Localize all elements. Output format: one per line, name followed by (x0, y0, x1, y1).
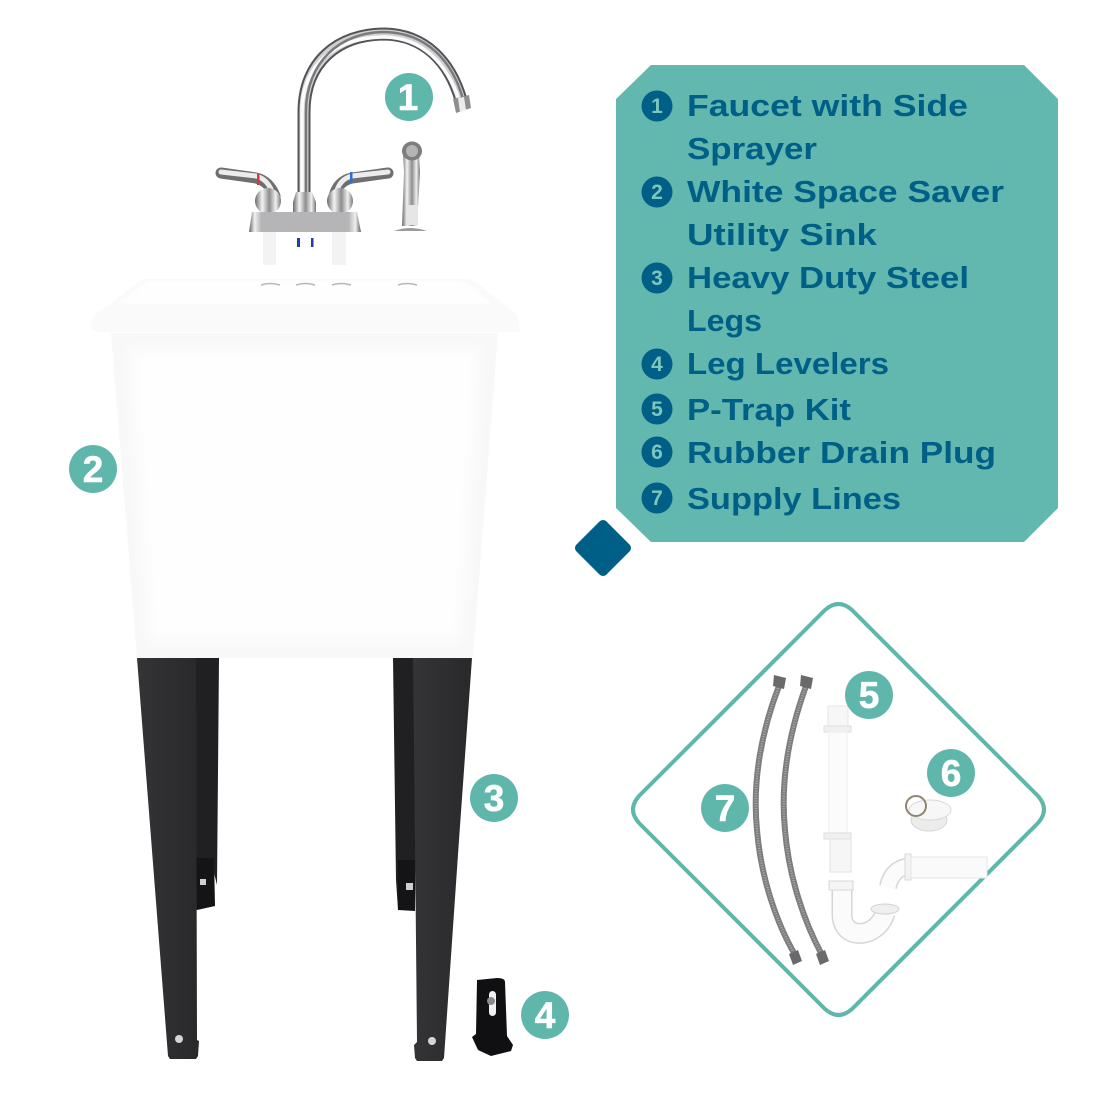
badge 4: 4 (535, 995, 556, 1036)
deck plate (249, 212, 361, 232)
item 3: Heavy Duty Steel (687, 260, 969, 295)
badge 2 (69, 445, 117, 493)
item 6: Rubber Drain Plug (687, 435, 996, 470)
drain plug (906, 796, 951, 831)
item 2: White Space Saver (687, 174, 1004, 209)
diamond outline (633, 604, 1044, 1015)
sink tub (91, 279, 520, 658)
item 1: Faucet with Side (687, 88, 968, 123)
item 3: Legs (687, 303, 762, 338)
faucet holes (261, 284, 417, 285)
left leg (137, 658, 219, 1059)
faucet with sprayer (221, 32, 471, 265)
item 2 (642, 174, 1004, 252)
panel background (616, 65, 1058, 542)
left handle (221, 172, 281, 214)
badge 5: 5 (859, 675, 879, 716)
badge 7: 7 (715, 788, 735, 829)
item 1 (642, 88, 968, 166)
item 5: 5 (651, 398, 663, 421)
item 5: P-Trap Kit (687, 392, 851, 427)
item 6: 6 (651, 441, 663, 464)
right handle (327, 172, 388, 214)
tub body (111, 333, 498, 658)
p-trap (829, 854, 987, 933)
item 1: Sprayer (687, 131, 817, 166)
item 4: 4 (651, 353, 663, 376)
badge 1 (385, 73, 433, 121)
badge 4 (521, 991, 569, 1039)
legend panel (616, 65, 1058, 542)
badge 6: 6 (941, 753, 961, 794)
item 2: Utility Sink (687, 217, 878, 252)
tailpiece (824, 706, 851, 872)
item 2: 2 (651, 181, 663, 204)
badge 1: 1 (398, 77, 418, 118)
badge 3 (470, 774, 518, 822)
item 3: 3 (651, 267, 663, 290)
badge 5 (845, 671, 893, 719)
side sprayer (394, 142, 427, 231)
badge 7 (701, 784, 749, 832)
item 7: 7 (651, 487, 663, 510)
badge 2: 2 (83, 449, 103, 490)
accessories kit diamond (633, 604, 1044, 1015)
leg leveler (472, 978, 513, 1056)
tub rim (91, 279, 520, 332)
item 4: Leg Levelers (687, 346, 889, 381)
item 1: 1 (651, 95, 663, 118)
supply stubs (263, 232, 276, 265)
item 5 (642, 392, 851, 427)
badge 6 (927, 749, 975, 797)
item 7: Supply Lines (687, 481, 901, 516)
supply lines (756, 675, 829, 965)
badge 3: 3 (484, 778, 504, 819)
sink legs (137, 658, 472, 1061)
right leg (393, 658, 472, 1061)
spout (302, 32, 471, 198)
spout base (293, 192, 316, 213)
blue diamond accent (575, 520, 631, 576)
item 3 (642, 260, 969, 338)
